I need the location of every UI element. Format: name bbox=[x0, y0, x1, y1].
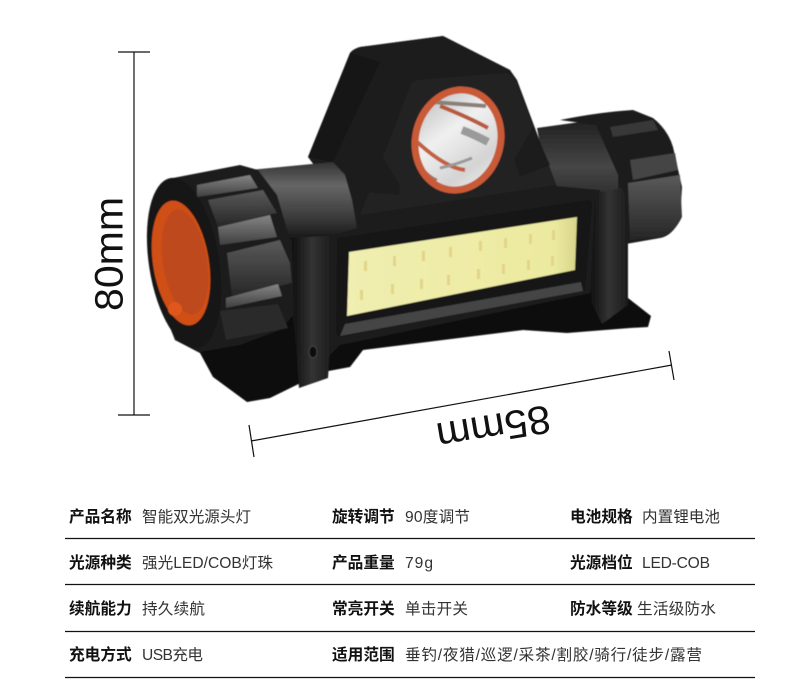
row 1: 智能双光源头灯 bbox=[142, 508, 251, 526]
row 2: 光源档位 bbox=[570, 553, 633, 572]
row 1 bbox=[69, 507, 720, 526]
left barrel bbox=[250, 162, 357, 240]
top housing bbox=[308, 36, 570, 240]
row 2: 产品重量 bbox=[332, 554, 395, 572]
left knob bbox=[150, 165, 298, 352]
row 3: 防水等级 bbox=[570, 599, 633, 618]
dimension: 85mm width bbox=[249, 351, 674, 459]
lens bbox=[410, 86, 506, 194]
left clamp strip bbox=[292, 236, 332, 388]
row 4: USB充电 bbox=[142, 646, 203, 664]
COB frame bbox=[336, 200, 592, 337]
COB light panel bbox=[340, 217, 583, 336]
base and mounting feet bbox=[175, 285, 651, 402]
row 3 bbox=[69, 599, 716, 618]
row 1: 90度调节 bbox=[405, 508, 470, 526]
row 2: 光源种类 bbox=[69, 554, 132, 572]
row 2: 79g bbox=[405, 555, 433, 572]
row 3: 持久续航 bbox=[142, 600, 205, 618]
main body bbox=[285, 186, 605, 385]
row 1: 电池规格 bbox=[570, 507, 633, 526]
row 3: 续航能力 bbox=[69, 599, 132, 618]
row 4 bbox=[69, 645, 702, 664]
end cap: orange button bbox=[136, 173, 232, 353]
right barrel and knob bbox=[537, 110, 682, 250]
row 2: 强光LED/COB灯珠 bbox=[142, 554, 273, 572]
row 2 bbox=[69, 553, 710, 572]
product: headlamp bbox=[136, 36, 682, 402]
row 2: LED-COB bbox=[642, 555, 710, 572]
right clamp strip bbox=[590, 188, 628, 324]
dimension: 85mm width: 85mm bbox=[433, 396, 554, 459]
row 3: 常亮开关 bbox=[332, 599, 395, 618]
row 1: 旋转调节 bbox=[332, 508, 395, 526]
row 1: 产品名称 bbox=[69, 508, 132, 526]
row 4: 充电方式 bbox=[69, 645, 132, 664]
dimension: 80mm height: 80mm bbox=[88, 197, 132, 311]
specification table bbox=[65, 507, 755, 678]
row 3: 生活级防水 bbox=[637, 600, 716, 618]
row 4: 适用范围 bbox=[332, 646, 395, 664]
row 4: 垂钓/夜猎/巡逻/采茶/割胶/骑行/徒步/露营 bbox=[405, 646, 702, 664]
indicator hole bbox=[309, 346, 317, 358]
row 3: 单击开关 bbox=[405, 600, 468, 618]
row 1: 内置锂电池 bbox=[642, 508, 720, 526]
